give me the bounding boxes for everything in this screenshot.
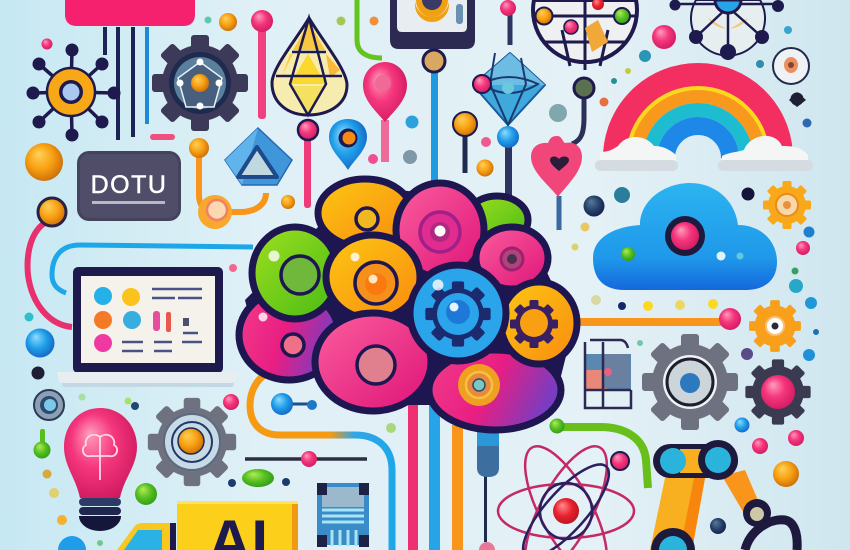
icon: yellow faceted gem on pin <box>272 18 347 208</box>
green dot <box>386 423 396 433</box>
icon: top blue gem on pin <box>473 53 545 201</box>
network globe <box>533 0 637 70</box>
orange to blue pipe <box>250 373 392 550</box>
icon: yellow truck <box>117 523 176 550</box>
left cloud <box>595 137 678 171</box>
green hook pipe <box>550 418 648 488</box>
icon: dark network gear <box>152 35 248 131</box>
lobe: yellow top <box>318 179 412 247</box>
lobe: pink top <box>396 183 484 277</box>
icon: green pin <box>34 429 50 458</box>
lobe highlights <box>258 250 444 322</box>
lobe: pink right <box>476 227 548 289</box>
icon: ring target <box>34 390 64 420</box>
icon: small orange gear <box>763 181 811 229</box>
lobe: pink lower left <box>239 290 339 380</box>
icon: orange ball <box>25 143 63 181</box>
dashboard dots <box>94 287 189 352</box>
laptop with dashboard <box>57 267 238 387</box>
icon: blue location pin <box>329 119 367 170</box>
icon: heart with hook <box>531 78 594 230</box>
blue cable <box>52 245 253 293</box>
icon: camera device top <box>390 0 475 49</box>
icon: small pins <box>423 50 567 186</box>
dashboard lines <box>122 289 202 351</box>
right side dots <box>591 226 819 534</box>
vertical brain cables <box>408 405 463 550</box>
pen-shaped probe below brain <box>477 425 499 550</box>
icon: green leaf capsule <box>228 469 290 487</box>
rainbow with clouds <box>595 75 813 171</box>
dark and teal balls <box>572 187 754 250</box>
robot arm <box>650 440 797 550</box>
blue dumbbell <box>271 393 317 415</box>
pink cable with ball <box>28 198 72 327</box>
icon: blue triangle gem <box>225 128 292 185</box>
icon: pink pin stick <box>251 10 273 119</box>
icon: ring with orange core <box>773 48 809 84</box>
icon: large gray gear <box>642 334 738 430</box>
left column dots <box>24 312 239 550</box>
lobe: green left <box>252 227 338 319</box>
lobe: pink large bottom <box>315 313 431 411</box>
brain <box>239 179 577 430</box>
icon: orange gear right <box>749 300 801 352</box>
slider <box>245 451 367 467</box>
green pipe top <box>357 0 382 58</box>
icon: top pink box with cables <box>65 0 195 140</box>
icon: small device <box>585 340 631 408</box>
icon: orange node hub <box>26 44 120 142</box>
lobe: blue centre with gear <box>410 265 506 361</box>
small dots top mid <box>336 16 418 164</box>
lobe: magenta bottom right <box>429 350 561 430</box>
orange line with pink ball <box>575 308 741 330</box>
brain dark silhouette <box>245 185 570 425</box>
small dots top left <box>42 13 237 140</box>
icon: gray gear with orange core <box>148 398 236 486</box>
pin stick small <box>500 0 516 45</box>
top right atom <box>670 0 784 60</box>
label box: DOTU <box>77 151 181 221</box>
icon: orange hook with swirl <box>189 138 295 229</box>
right cloud <box>718 136 813 171</box>
lobe: orange right <box>501 282 577 364</box>
atom <box>498 435 634 550</box>
icon: pink light bulb <box>64 408 137 531</box>
lobe: green back <box>466 196 528 244</box>
AI sign <box>177 501 298 550</box>
icon: dark gear with pink ball <box>745 359 811 425</box>
label box: DOTU: DOTU <box>91 171 167 199</box>
blue cloud with eye <box>593 183 777 290</box>
upper right dots <box>600 25 812 128</box>
icon: chip <box>317 483 369 547</box>
icon: pink balloon pin <box>363 62 407 162</box>
lobe: orange middle <box>326 235 420 319</box>
